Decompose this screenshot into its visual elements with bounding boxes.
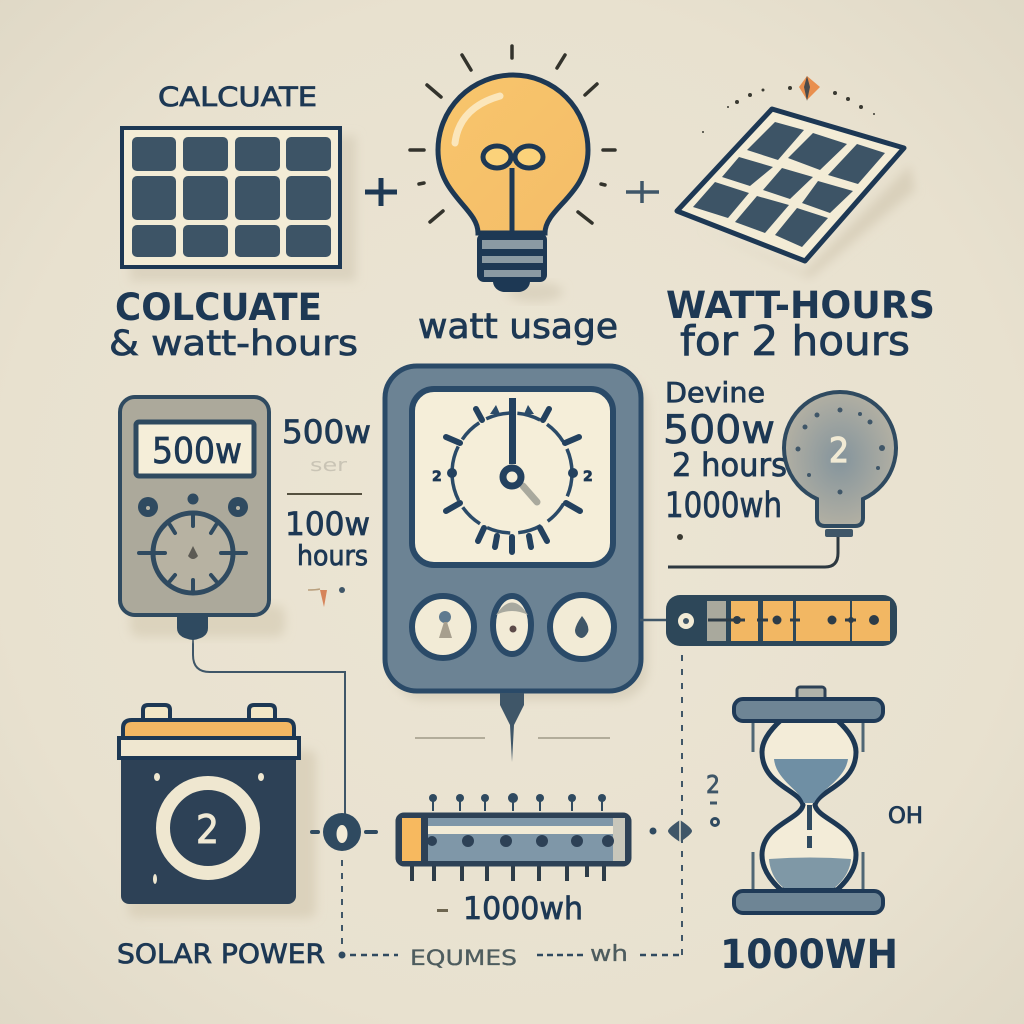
- label: 100w hours: hours: [297, 539, 368, 572]
- hourglass knob: [797, 687, 825, 702]
- plus sign left: [365, 178, 397, 206]
- icon: hourglass: [734, 687, 883, 913]
- meter display: 500w: [152, 431, 242, 472]
- hourglass glass: [762, 720, 856, 890]
- heading: calculate: CALCUATE: [158, 82, 317, 113]
- side marks near hourglass: [706, 770, 720, 826]
- plus sign right: [626, 181, 659, 203]
- hourglass top bar: [734, 699, 883, 721]
- text block: device values: 1000wh: [665, 486, 782, 526]
- icon: light bulb: [410, 46, 615, 302]
- label: 1000wh total: 1000WH: [720, 932, 898, 978]
- battery top band: [123, 720, 294, 740]
- icon: flat solar panel: [122, 128, 356, 281]
- panel: left multimeter: [120, 397, 285, 640]
- meter dial: [139, 513, 246, 593]
- dashed bottom line right: [640, 954, 683, 956]
- icon: car battery: 2: [196, 808, 219, 853]
- panel: central clock meter: [385, 366, 648, 762]
- small marker: [308, 587, 345, 607]
- label: oh: OH: [888, 804, 923, 829]
- lamp wire: [668, 537, 838, 567]
- heading: watt-hours for 2 hours: for 2 hours: [680, 317, 910, 365]
- clock numerals: [432, 469, 593, 485]
- label: equmes: EQUMES: [410, 946, 517, 970]
- heading: colcuate and watt-hours: & watt-hours: [109, 324, 358, 364]
- label: faint per: ser: [310, 455, 348, 476]
- icon: battery bar chip: [397, 793, 630, 881]
- clock numerals: 2: [432, 469, 442, 485]
- chip bottom pins: [412, 866, 604, 881]
- dashed bottom line middle: [537, 954, 585, 956]
- clock ring: [452, 413, 572, 533]
- clock numerals: 2: [583, 469, 593, 485]
- decorative dots and diamond above tilted panel: [702, 76, 875, 133]
- node right of chip: [650, 820, 692, 842]
- dashed lower left vertical: [341, 860, 343, 950]
- icon: power strip: [666, 595, 897, 646]
- text block: device values: [663, 376, 787, 526]
- label: 100w hours: [285, 505, 370, 572]
- chip top pins: [429, 793, 606, 811]
- side marks near hourglass: 2: [706, 770, 720, 799]
- clock hand: [509, 398, 516, 464]
- text block: device values: 2 hours: [672, 446, 787, 484]
- bulb rays: [410, 46, 615, 223]
- node on left vertical: [312, 813, 376, 851]
- text block: device values: 500w: [663, 408, 775, 453]
- clock screen: [412, 389, 613, 565]
- label: watt usage: watt usage: [418, 307, 618, 347]
- connector to power strip: [640, 619, 666, 621]
- battery terminals: [143, 705, 275, 722]
- battery ring: [163, 783, 253, 873]
- label: equals 1000wh: 1000wh: [463, 891, 583, 927]
- stem side lines: [415, 737, 610, 739]
- label: 100w hours: 100w: [285, 505, 370, 543]
- wiring: meter to dashed line: [193, 636, 345, 815]
- text block: device values: Devine: [665, 376, 765, 409]
- bottom sand: [769, 858, 851, 888]
- dashed bottom line left: [338, 952, 398, 958]
- falling sand: [807, 805, 812, 848]
- top sand: [774, 759, 848, 803]
- filament: [483, 146, 543, 233]
- clock hub: [503, 468, 521, 486]
- label: 500w: 500w: [282, 413, 371, 451]
- meter knobs: [138, 494, 248, 517]
- label: solar power: SOLAR POWER: [117, 939, 325, 970]
- icon: grey dial lamp: [668, 392, 896, 567]
- heading: watt-hours for 2 hours: [666, 284, 935, 365]
- label: wh: wh: [590, 942, 628, 967]
- icon: car battery: [119, 705, 316, 918]
- clock ticks: [446, 409, 580, 552]
- heading: colcuate and watt-hours: [109, 286, 358, 364]
- dashed right vertical: [681, 655, 683, 955]
- hourglass bottom bar: [734, 891, 883, 913]
- clock shadow hand: [523, 486, 537, 502]
- icon: grey dial lamp: 2: [829, 431, 849, 471]
- heading: colcuate and watt-hours: COLCUATE: [115, 286, 322, 329]
- heading: watt-hours for 2 hours: WATT-HOURS: [666, 284, 935, 327]
- hourglass side rods: [753, 722, 863, 890]
- meter display: [136, 422, 254, 476]
- divider: [287, 493, 362, 495]
- meter stem: [500, 693, 524, 762]
- meter plug: [177, 616, 208, 640]
- buttons: [412, 595, 614, 659]
- icon: tilted solar panel: [677, 109, 915, 278]
